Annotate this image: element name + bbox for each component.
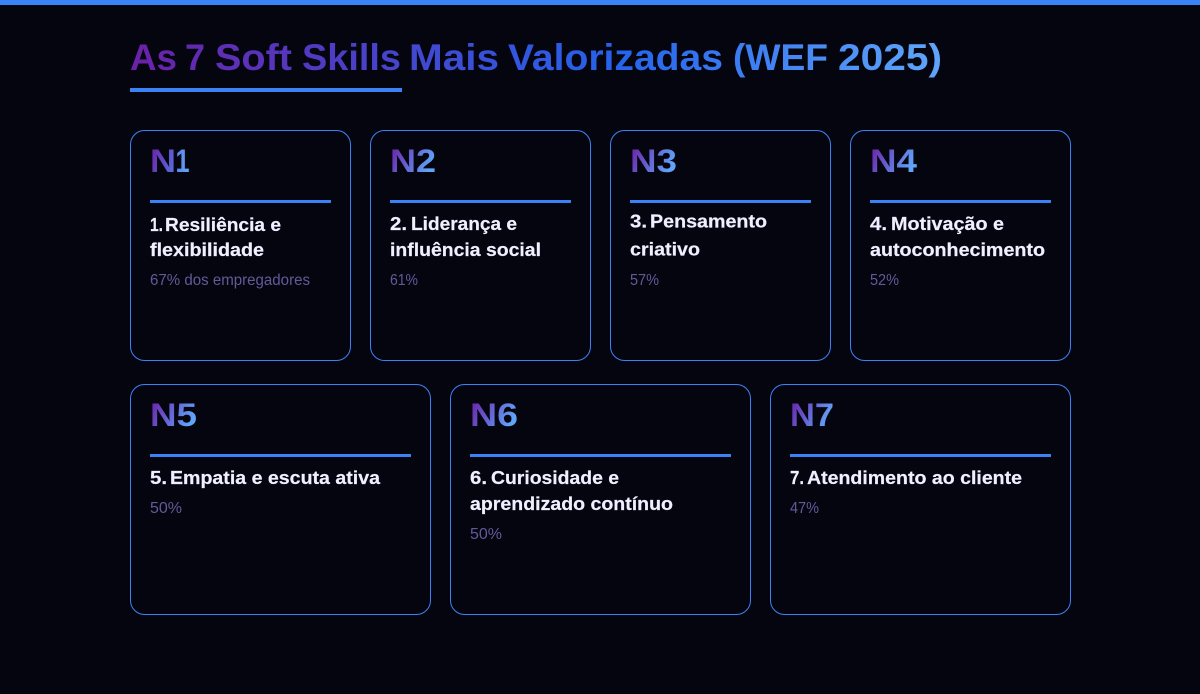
- panel: skill 4: 4.: [870, 213, 887, 234]
- panel: skill 3: criativo: [630, 238, 700, 260]
- panel: skill 4: 52%: [870, 272, 899, 289]
- panel: skill 1: Resiliência e: [165, 214, 281, 235]
- panel: skill 2: 2.: [390, 213, 407, 234]
- panel: skill 3: [610, 130, 830, 360]
- panel: skill 2: 61%: [390, 272, 418, 289]
- panel: skill 1: flexibilidade: [150, 239, 264, 260]
- panel: skill 3: N3: [630, 143, 677, 179]
- panel: skill 6: 6.: [470, 467, 487, 488]
- panel: skill 5: 5.: [150, 467, 167, 488]
- title: As: [130, 37, 177, 78]
- title underline: [130, 88, 402, 92]
- title: 2025): [838, 37, 942, 78]
- panel: skill 7: 7.: [790, 467, 804, 488]
- panel: skill 1: [130, 130, 350, 360]
- panel: skill 2: Liderança e: [411, 213, 517, 234]
- panel: skill 5: 50%: [150, 500, 182, 517]
- panel: skill 4: [850, 130, 1070, 360]
- panel: skill 6: 50%: [470, 526, 502, 543]
- title: (WEF: [733, 37, 828, 78]
- panel: skill 4: Motivação e: [891, 213, 1004, 234]
- panel: skill 6: N6: [470, 397, 518, 433]
- title: Soft: [215, 37, 292, 78]
- panel: skill 1: 1.: [150, 214, 163, 235]
- panel: skill 3: Pensamento: [650, 210, 767, 232]
- panel: skill 1: 67% dos empregadores: [150, 272, 310, 289]
- panel: skill 1: N: [150, 143, 176, 179]
- panel: skill 4: N4: [870, 143, 917, 179]
- panel: skill 5: N5: [150, 397, 197, 433]
- panel: skill 4: autoconhecimento: [870, 239, 1045, 260]
- panel: skill 7: 47%: [790, 500, 819, 517]
- panel: skill 6: [450, 384, 750, 614]
- title: [130, 37, 942, 78]
- title: 7: [185, 37, 205, 78]
- title: Skills: [302, 37, 401, 78]
- title: Mais: [409, 37, 499, 78]
- panel: skill 5: [130, 384, 430, 614]
- panel: skill 3: 3.: [630, 210, 647, 232]
- panel: skill 2: influência social: [390, 239, 541, 260]
- panel: skill 2: N2: [390, 143, 436, 179]
- panel: skill 7: [770, 384, 1070, 614]
- panel: skill 7: N7: [790, 397, 834, 433]
- panel: skill 6: Curiosidade e: [491, 467, 619, 488]
- panel: skill 1: 1: [176, 143, 190, 179]
- top accent bar: [0, 0, 1200, 5]
- panel: skill 3: 57%: [630, 272, 659, 289]
- title: Valorizadas: [508, 37, 723, 78]
- panel: skill 5: Empatia e escuta ativa: [170, 467, 381, 488]
- panel: skill 2: [370, 130, 590, 360]
- panel: skill 6: aprendizado contínuo: [470, 493, 673, 514]
- panel: skill 7: Atendimento ao cliente: [807, 467, 1022, 488]
